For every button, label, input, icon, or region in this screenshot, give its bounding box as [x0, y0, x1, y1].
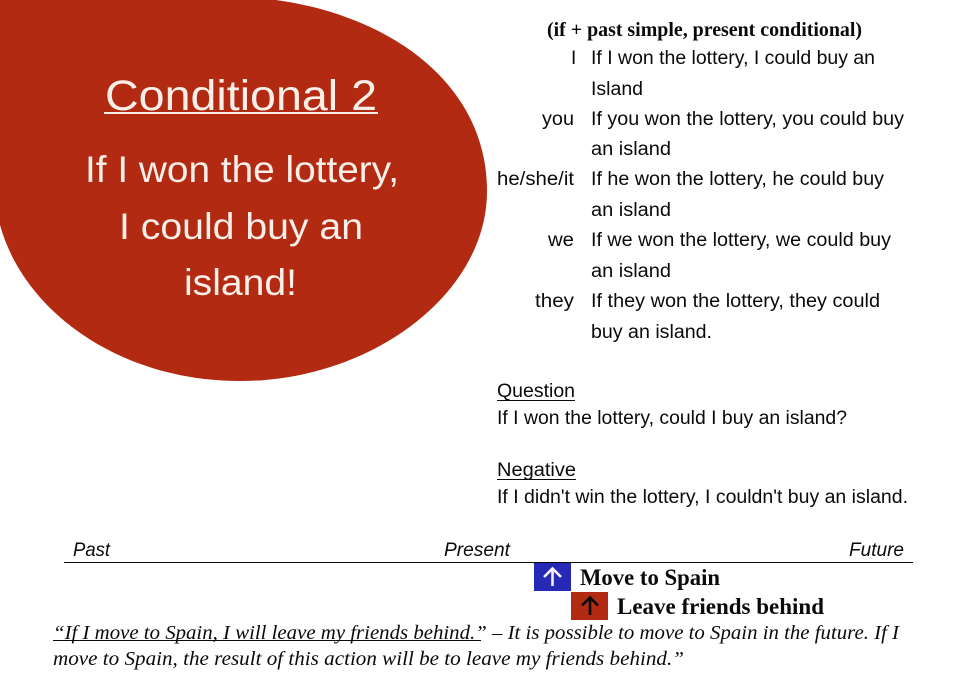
- timeline: [64, 540, 913, 563]
- conjugation table: If I won the lottery, I could buy an: [591, 48, 875, 69]
- example explanation: [53, 622, 900, 670]
- conjugation table: If you won the lottery, you could buy: [591, 109, 905, 130]
- conjugation table: we: [547, 230, 574, 251]
- conjugation table: [497, 48, 905, 343]
- conjugation table: he/she/it: [497, 169, 575, 190]
- label: move to Spain: Move to Spain: [580, 565, 720, 590]
- conjugation table: If we won the lottery, we could buy: [591, 230, 892, 251]
- conjugation table: an island: [591, 139, 671, 160]
- panel: red blob with title: [0, 0, 487, 381]
- main example sentence: I could buy an: [119, 206, 363, 247]
- conjugation table: you: [542, 109, 574, 130]
- icon: red up arrow: [571, 592, 608, 620]
- label: leave friends behind: Leave friends behind: [617, 594, 824, 619]
- example explanation: “If I move to Spain, I will leave my friends behind.” – It is possible to move to Spain in the future. If I: [53, 622, 900, 644]
- negative form: [497, 460, 908, 508]
- conjugation table: I: [571, 48, 576, 69]
- negative form: If I didn't win the lottery, I couldn't buy an island.: [497, 487, 908, 508]
- timeline: Future: [849, 540, 904, 561]
- conjugation table: they: [535, 291, 575, 312]
- conjugation table: buy an island.: [591, 322, 712, 343]
- main example sentence: island!: [184, 262, 297, 303]
- conjugation table: If he won the lottery, he could buy: [591, 169, 885, 190]
- question form: Question: [497, 381, 575, 402]
- timeline: Present: [444, 540, 511, 561]
- timeline: Past: [73, 540, 111, 561]
- question form: If I won the lottery, could I buy an island?: [497, 408, 847, 429]
- blob background: [0, 0, 487, 381]
- main example sentence: If I won the lottery,: [85, 149, 399, 190]
- conjugation table: an island: [591, 200, 671, 221]
- conjugation table: Island: [591, 79, 643, 100]
- title: Conditional 2: [105, 72, 377, 120]
- icon: blue up arrow: [534, 563, 571, 591]
- heading: formula: (if + past simple, present conditional): [547, 19, 862, 41]
- example explanation: move to Spain, the result of this action will be to leave my friends behind.”: [53, 648, 684, 670]
- main example sentence: [85, 149, 399, 303]
- question form: [497, 381, 847, 429]
- negative form: Negative: [497, 460, 576, 481]
- conjugation table: an island: [591, 261, 671, 282]
- conjugation table: If they won the lottery, they could: [591, 291, 880, 312]
